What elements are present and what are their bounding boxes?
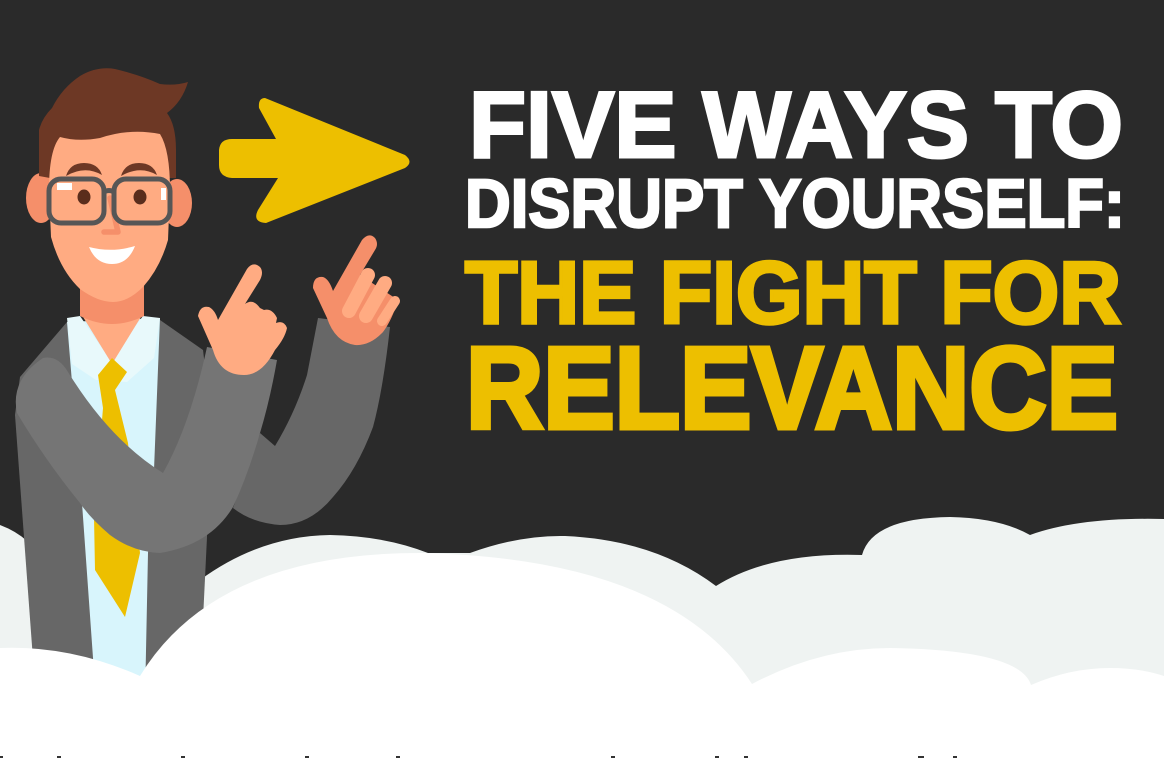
title line: disrupt yourself: DISRUPT YOURSELF: [465, 165, 1125, 242]
eyes [78, 190, 146, 204]
eyebrows [66, 163, 157, 176]
arrow [219, 98, 410, 223]
title line: relevance: RELEVANCE [466, 323, 1118, 453]
neck skin [80, 312, 144, 364]
glasses glare [57, 183, 166, 200]
title line: the fight for: THE FIGHT FOR [465, 243, 1121, 342]
right hand palm and index finger [313, 235, 398, 345]
cut-off text tops at bottom edge [0, 756, 957, 758]
collar [67, 316, 160, 382]
smile [89, 246, 135, 264]
near arm sleeve [16, 347, 277, 553]
glasses [49, 179, 170, 223]
necktie [94, 358, 140, 617]
left ear [26, 173, 56, 223]
title [465, 72, 1125, 453]
suit body [15, 320, 209, 700]
nose [104, 198, 118, 232]
right hand fingers [349, 275, 395, 321]
far arm sleeve [233, 318, 390, 525]
left hand [198, 264, 287, 375]
neck shadow [80, 280, 144, 324]
face [49, 132, 170, 302]
title line: five ways to: FIVE WAYS TO [469, 72, 1123, 177]
hair [39, 68, 188, 178]
businessman character [15, 68, 398, 700]
back cloud layer [0, 517, 1164, 720]
front white cloud layer [0, 553, 1164, 758]
right ear [162, 179, 192, 227]
shirt [67, 318, 160, 700]
